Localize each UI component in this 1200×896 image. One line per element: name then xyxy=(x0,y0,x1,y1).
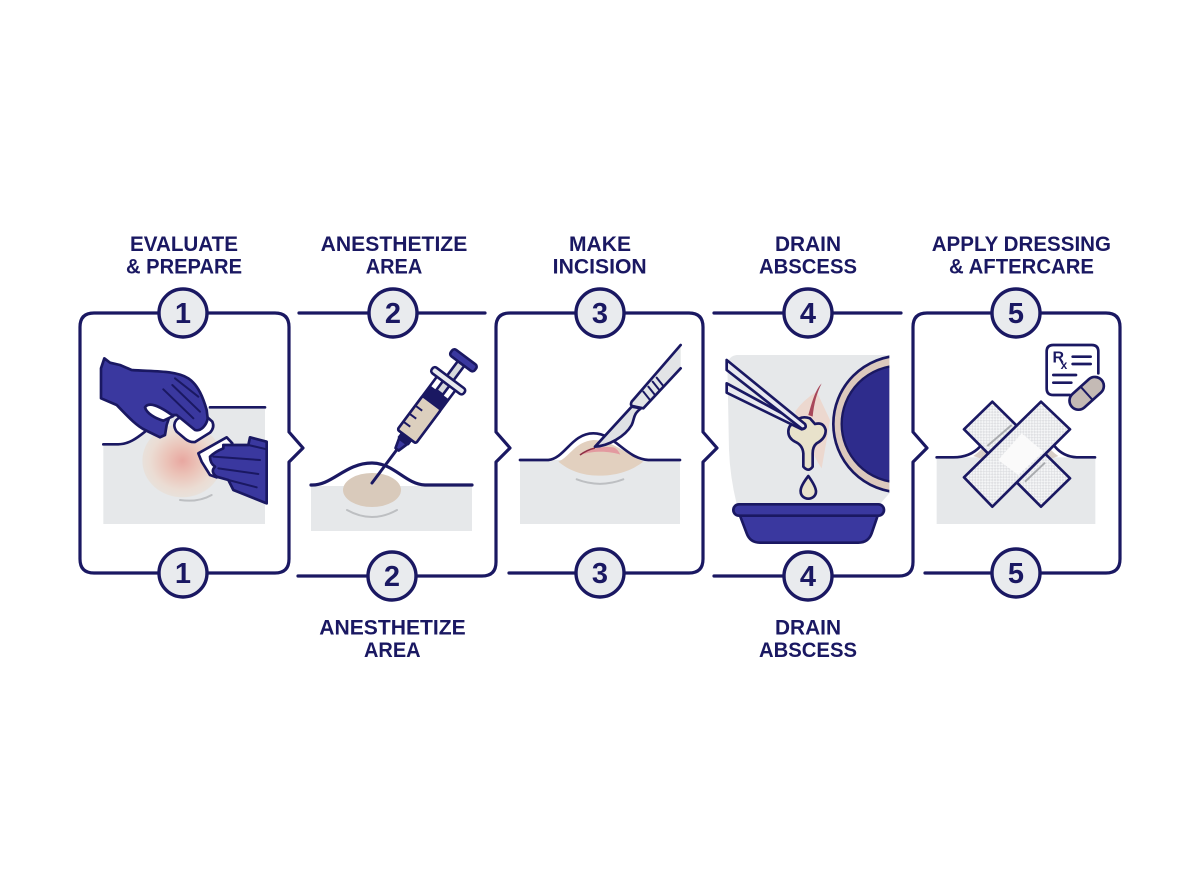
heading: step 2 top xyxy=(321,233,467,278)
icon: gauze pad lower xyxy=(198,437,232,477)
icon: syringe xyxy=(356,345,482,495)
illustration: forceps draining pus into basin xyxy=(725,355,890,544)
illustration: syringe into swelling xyxy=(311,345,482,531)
number badge: top 3: 3 xyxy=(592,298,608,330)
heading: step 4 bottom: DRAIN xyxy=(775,616,841,640)
icon: basin xyxy=(733,504,884,543)
heading: step 4 bottom: ABSCESS xyxy=(759,639,857,662)
frame: step 1 xyxy=(80,313,303,573)
number badge: top 2 xyxy=(369,289,417,337)
icon: prescription and pill xyxy=(1047,345,1108,413)
icon: under bandage strip xyxy=(964,402,1070,507)
illustration: gloved hands with gauze on red skin xyxy=(101,358,267,524)
heading: step 5: & AFTERCARE xyxy=(949,256,1094,278)
heading: step 3 xyxy=(553,233,647,278)
icon: pus drip xyxy=(788,417,826,470)
number badge: top 1: 1 xyxy=(175,298,191,330)
icon: prescription and pill: x xyxy=(1061,358,1068,372)
heading: step 4 top xyxy=(759,233,857,278)
number badge: top 4: 4 xyxy=(800,298,816,330)
heading: step 5 xyxy=(932,233,1111,278)
heading: step 2 top: AREA xyxy=(366,256,422,278)
illustration: crossed bandages xyxy=(937,345,1108,524)
number badge: bottom 4 xyxy=(784,552,832,600)
icon: gauze pad top xyxy=(174,417,213,442)
heading: step 5: APPLY DRESSING xyxy=(932,233,1111,256)
icon: droplet xyxy=(801,476,816,499)
number badge: top 5: 5 xyxy=(1008,298,1024,330)
number badge: top 4 xyxy=(784,289,832,337)
number badge: top 3 xyxy=(576,289,624,337)
heading: step 2 bottom: ANESTHETIZE xyxy=(319,616,466,640)
number badge: bottom 5: 5 xyxy=(1008,558,1024,590)
frame: step 3 xyxy=(509,313,717,573)
number badge: bottom 4: 4 xyxy=(800,561,816,593)
panel: step 5 apply dressing and aftercare xyxy=(925,233,1120,597)
heading: step 3: INCISION xyxy=(553,256,647,278)
illustration: scalpel making incision xyxy=(520,345,681,524)
panel: step 4 drain abscess xyxy=(714,233,992,662)
heading: step 1: & PREPARE xyxy=(126,256,242,278)
number badge: bottom 3: 3 xyxy=(592,558,608,590)
icon: over bandage strip xyxy=(964,402,1070,507)
icon: finger gap xyxy=(145,405,173,421)
icon: round bowl xyxy=(832,355,890,493)
number badge: top 1 xyxy=(159,289,207,337)
number badge: bottom 2 xyxy=(368,552,416,600)
number badge: top 5 xyxy=(992,289,1040,337)
frame: step 4 xyxy=(714,313,992,576)
frame: step 2 xyxy=(298,313,575,576)
heading: step 1 xyxy=(126,233,242,278)
icon: bandage pad xyxy=(998,433,1043,475)
panel: step 1 evaluate and prepare xyxy=(80,233,303,597)
number badge: top 2: 2 xyxy=(385,298,401,330)
heading: step 2 bottom xyxy=(319,616,466,662)
panel: step 2 anesthetize area xyxy=(298,233,575,662)
heading: step 2 bottom: AREA xyxy=(364,639,421,662)
icon: forceps xyxy=(727,360,806,429)
number badge: bottom 1: 1 xyxy=(175,558,191,590)
number badge: bottom 3 xyxy=(576,549,624,597)
icon: prescription and pill: R xyxy=(1053,350,1065,367)
panel: step 3 make incision xyxy=(509,233,717,597)
heading: step 4 bottom xyxy=(759,616,857,662)
icon: scalpel xyxy=(595,345,681,447)
icon: lower gloved hand xyxy=(210,437,267,503)
icon: upper gloved hand xyxy=(101,358,208,437)
number badge: bottom 2: 2 xyxy=(384,561,400,593)
heading: step 2 top: ANESTHETIZE xyxy=(321,233,467,256)
heading: step 3: MAKE xyxy=(569,233,631,256)
heading: step 4 top: DRAIN xyxy=(775,233,841,256)
heading: step 1: EVALUATE xyxy=(130,233,238,256)
heading: step 4 top: ABSCESS xyxy=(759,256,857,278)
frame: step 5 xyxy=(925,313,1120,573)
number badge: bottom 5 xyxy=(992,549,1040,597)
number badge: bottom 1 xyxy=(159,549,207,597)
